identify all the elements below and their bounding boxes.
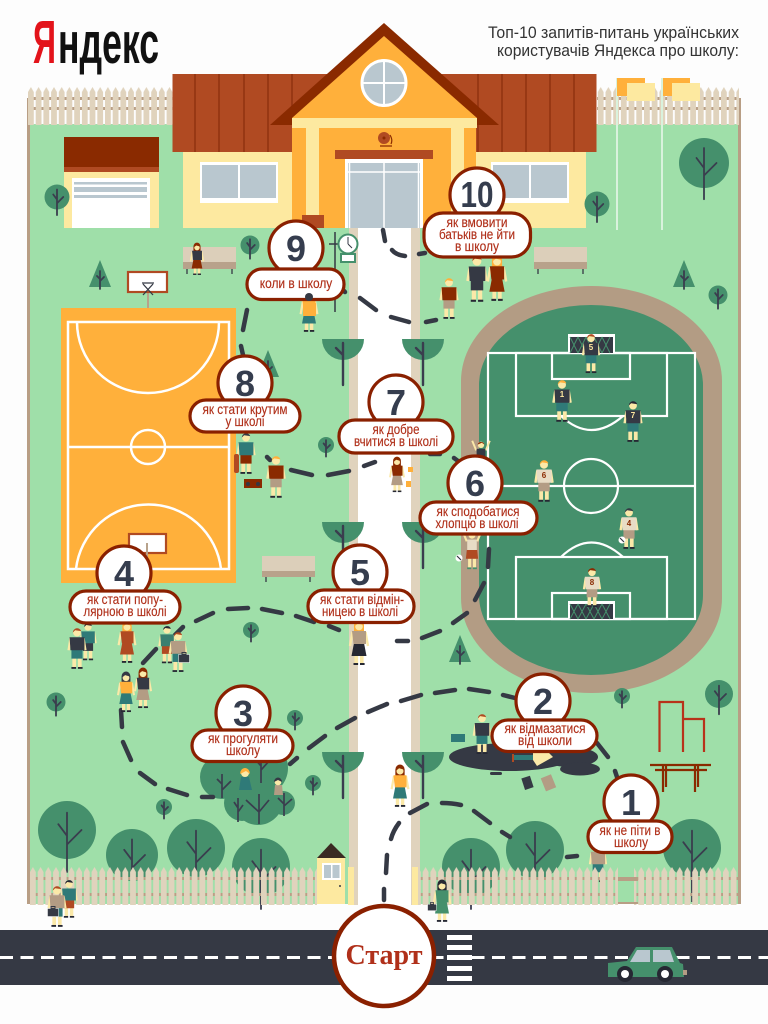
girl near 5 [350, 620, 368, 665]
marker 3: як прогуляти [208, 731, 278, 746]
boy near 10 [441, 278, 457, 319]
marker 5: ницею в школі [322, 604, 398, 619]
player numbers: 5 [589, 343, 594, 352]
marker 9: коли в школу [260, 276, 332, 291]
start badge [334, 906, 434, 1006]
outdoor gym [650, 702, 711, 792]
car [608, 947, 687, 982]
walkway [349, 228, 420, 905]
girl near 9 [301, 290, 317, 332]
marker 6: як сподобатися [436, 504, 520, 519]
marker 4: 4 [114, 553, 134, 594]
marker 9 [247, 221, 344, 300]
father [468, 256, 486, 302]
school building [172, 23, 596, 228]
benches [183, 247, 587, 582]
mother [488, 254, 506, 301]
dropped book [541, 774, 556, 791]
marker 7: як добре [372, 422, 420, 437]
marker 6: 6 [465, 463, 485, 504]
marker 10: в школу [455, 239, 499, 254]
marker 6 [420, 456, 537, 534]
marker 7 [339, 375, 453, 453]
marker 2 [492, 674, 597, 752]
players [583, 334, 599, 373]
round window [362, 60, 406, 106]
football track [461, 286, 722, 693]
player numbers: 1 [560, 390, 565, 399]
marker 10: батьків не йти [439, 227, 515, 242]
school grounds lawn [27, 98, 741, 904]
marker 1 [588, 775, 672, 852]
tree cluster at 3 [200, 740, 295, 825]
girl near 7 [390, 457, 404, 492]
road [0, 930, 768, 985]
dropped bag [521, 776, 534, 790]
cheering girl near 6 [462, 531, 482, 569]
boy near 8 [267, 456, 285, 498]
bottom fence [30, 867, 738, 905]
heading text: Топ-10 запитів-питань українських [488, 24, 740, 42]
logo: Яндекс: ндекс [58, 11, 159, 76]
player numbers [542, 343, 636, 587]
puddle [449, 743, 600, 776]
people outside the fence [48, 880, 450, 927]
marker 10: як вмовити [446, 215, 508, 230]
football pitch [479, 305, 703, 675]
red box [302, 215, 324, 228]
marker 3: 3 [233, 693, 253, 734]
logo: Яндекс: Я [33, 8, 56, 76]
gate house [317, 843, 346, 904]
top fence [28, 87, 739, 125]
marker 4: як стати попу- [87, 592, 163, 607]
marker 2: як відмазатися [504, 721, 586, 736]
school walls [183, 152, 586, 228]
skater near 8 [238, 433, 254, 474]
people [69, 243, 641, 882]
heading text: користувачів Яндекса про школу: [497, 42, 739, 60]
marker 5 [308, 545, 414, 622]
marker 2: від школи [518, 733, 572, 748]
marker 1: як не піти в [600, 823, 660, 838]
central block [270, 23, 499, 228]
marker 7: 7 [386, 382, 406, 423]
goals [568, 334, 615, 619]
skateboard [234, 454, 239, 473]
marker 7: вчитися в школі [354, 434, 438, 449]
marker 10: 10 [460, 174, 494, 215]
street clock [329, 232, 358, 312]
boy near 2 [474, 714, 490, 754]
player numbers: 4 [627, 519, 632, 528]
player numbers: 6 [542, 471, 547, 480]
logo: Яндекс [33, 8, 159, 76]
briefcase [178, 652, 190, 662]
garage [64, 137, 159, 228]
cheering player [472, 441, 490, 476]
marker 3 [192, 686, 293, 762]
marker 8 [190, 356, 300, 432]
group near 4 [80, 623, 96, 660]
kids in bushes [239, 768, 283, 795]
marker 3: школу [226, 743, 260, 758]
dashed route [121, 230, 617, 900]
boombox [244, 479, 262, 488]
flags [616, 78, 700, 230]
marker 10 [424, 168, 530, 257]
marker 5: 5 [350, 552, 370, 593]
marker 5: як стати відмін- [320, 592, 404, 607]
side windows [200, 162, 569, 203]
marker 1: школу [614, 835, 648, 850]
girl on walkway [392, 765, 408, 807]
marker 6: хлопцю в школі [436, 516, 518, 531]
start badge: Старт [346, 940, 423, 971]
suitcase [451, 734, 465, 742]
player numbers: 8 [590, 578, 595, 587]
soccer balls [456, 536, 626, 562]
girl in front of marker 9 [303, 293, 316, 316]
marker 1: 1 [621, 782, 641, 823]
school roof [172, 74, 596, 152]
player numbers: 7 [631, 411, 636, 420]
heading text [488, 24, 740, 60]
bell [378, 132, 392, 146]
girl on bench [191, 243, 203, 275]
lying person [512, 752, 553, 766]
falling papers [406, 467, 413, 487]
marker 8: 8 [235, 363, 255, 404]
basketball hoop top [128, 272, 167, 318]
basketball court [61, 308, 236, 583]
marker 9: 9 [286, 228, 306, 269]
marker 8: у школі [226, 414, 264, 429]
marker 8: як стати крутим [202, 402, 288, 417]
marker 2: 2 [533, 681, 553, 722]
boy near 1 [590, 843, 606, 882]
crosswalk [447, 935, 472, 981]
marker 4: лярною в школі [84, 604, 166, 619]
trees [38, 138, 733, 909]
door [335, 150, 433, 228]
marker 4 [70, 546, 180, 623]
